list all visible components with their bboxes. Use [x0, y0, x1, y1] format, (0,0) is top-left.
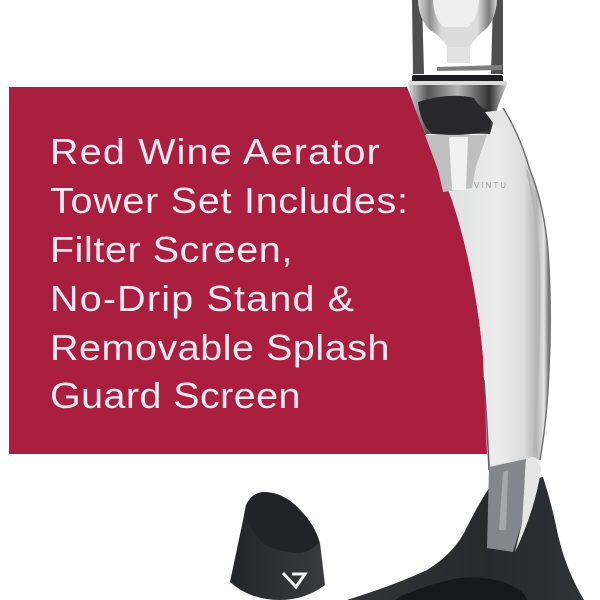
aerator tower	[408, 0, 550, 470]
panel text: No-Drip Stand &	[50, 278, 355, 319]
tower body	[445, 108, 550, 470]
bowl inner	[433, 0, 479, 27]
stand	[347, 457, 584, 600]
collar	[408, 84, 507, 134]
right flap	[485, 110, 507, 128]
cap opening	[245, 492, 319, 553]
black band	[418, 96, 492, 135]
panel text: Removable Splash	[50, 327, 390, 368]
icon: cap logo	[283, 573, 305, 587]
foot highlight	[515, 457, 541, 552]
panel text: Tower Set Includes:	[50, 180, 409, 221]
panel text: Guard Screen	[50, 375, 301, 416]
right rail	[491, 0, 503, 74]
collar rim	[408, 81, 507, 85]
tower foot inner	[499, 470, 508, 530]
glass bowl	[418, 0, 497, 62]
panel text: Filter Screen,	[50, 229, 293, 270]
valve bar	[437, 65, 502, 71]
stand recess	[395, 578, 527, 600]
tower side highlight	[527, 170, 540, 455]
brand mark on tower: VINTU	[474, 181, 508, 190]
tower foot	[487, 459, 526, 552]
panel text: Red Wine Aerator	[50, 131, 381, 172]
stem	[447, 47, 470, 63]
cap body	[230, 492, 325, 600]
splash guard cap	[230, 492, 325, 600]
dark ring	[412, 75, 503, 82]
left rail	[412, 0, 424, 74]
spout	[425, 135, 487, 192]
tower outer edge	[503, 108, 550, 460]
tower inner edge	[484, 380, 489, 470]
spout highlight	[449, 137, 468, 190]
panel text	[50, 131, 409, 416]
stand body	[347, 477, 584, 600]
panel: red background	[9, 87, 487, 454]
